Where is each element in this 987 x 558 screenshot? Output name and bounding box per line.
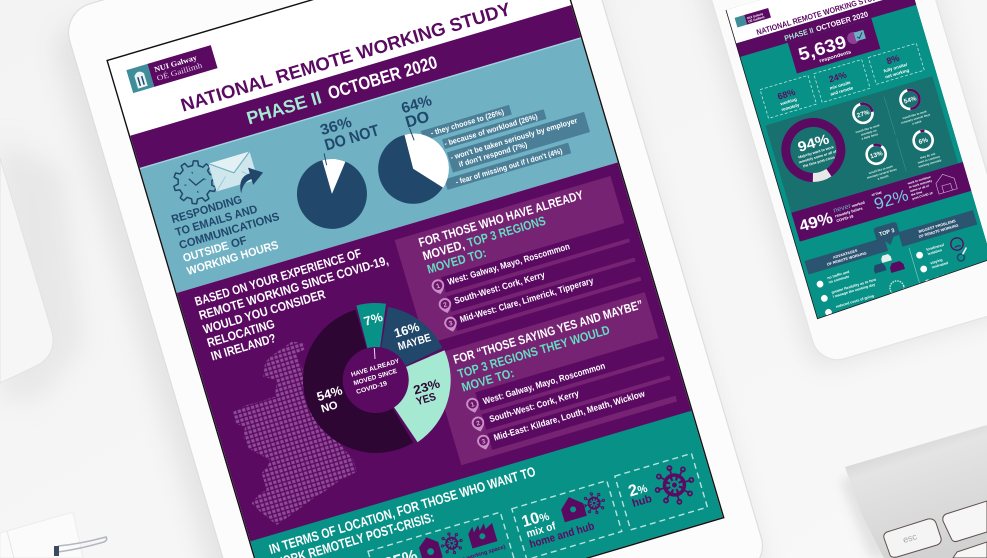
list rows: West: Galway, Mayo, Roscommon: [482, 361, 606, 406]
stat: 2%: [625, 461, 699, 517]
phone: [696, 0, 987, 366]
stat: 25%: [380, 516, 506, 558]
phone stat text: 68%: [776, 87, 796, 102]
phone top 3 lists: greater flexibility as to how: [831, 278, 877, 295]
phone top 3 headers: OF REMOTE WORKING: [826, 251, 867, 267]
phone body: [696, 0, 987, 366]
phone header: OÉ Gaillimh: [747, 14, 765, 24]
phone big donut: remotely some or all of: [798, 149, 838, 165]
pins: 2: [443, 301, 448, 309]
phone top 3 headers: [804, 210, 978, 274]
segment: yes 23%: [394, 350, 451, 442]
list rows: [446, 244, 593, 322]
reasons list: [420, 105, 590, 190]
phone top 3 lists: no traffic and: [827, 270, 850, 280]
donut labels: 23%: [412, 376, 442, 397]
infographic screen: [108, 0, 723, 558]
responding text: RESPONDING: [170, 194, 244, 226]
chart: 64% do pie: [378, 96, 449, 204]
phone dark panel: [765, 76, 958, 213]
pins: 3: [448, 320, 454, 328]
phase band: OCTOBER 2020: [326, 52, 440, 103]
phone small donuts: [851, 87, 935, 166]
key: esc: [884, 519, 941, 557]
icon: envelope: [208, 152, 258, 192]
dashed boxes: [367, 453, 709, 558]
phone stat text: and remote: [830, 85, 854, 97]
heading: [418, 190, 582, 274]
phone purple stat band: 49%: [797, 210, 835, 236]
phone small donut captions: would like to work: [867, 164, 894, 175]
phone top 3 lists: loneliness/: [926, 243, 945, 252]
phone purple stat band: [791, 162, 971, 242]
phone top 3 headers: TOP 3: [879, 228, 895, 238]
phone top 3 headers: OF REMOTE WORKING: [918, 223, 959, 239]
phone big donut: [781, 118, 846, 182]
relocating question: WOULD YOU CONSIDER: [201, 287, 327, 337]
phone shadow: [688, 0, 987, 372]
phone screen edge: [726, 0, 987, 319]
location heading: [267, 464, 541, 558]
logo: NUI Galway: [153, 53, 198, 74]
phone top 3 headers: ADVANTAGES: [833, 249, 858, 260]
heading: MOVED TO:: [425, 246, 488, 277]
heading: TOP 3 REGIONS THEY WOULD: [456, 323, 611, 381]
key: lower row: [953, 542, 987, 558]
phone purple stat band: some or all of: [909, 184, 929, 193]
phone stat text: [778, 55, 910, 112]
stat: 2%: hub: [631, 493, 654, 510]
logo: [126, 45, 218, 93]
phone respondents block: [788, 18, 880, 73]
chart: 36% do not pie: DO NOT: [323, 122, 381, 154]
panel: already moved regions: [395, 174, 650, 344]
phone stat text: 8%: [885, 53, 901, 66]
logo: OÉ Gaillimh: [155, 60, 203, 83]
tablet body: [61, 0, 770, 558]
phone big donut: 94%: [796, 130, 831, 155]
phone top 3 lists: reduced costs of going: [835, 294, 874, 309]
list rows: South-West: Cork, Kerry: [453, 270, 546, 306]
list rows: [482, 364, 644, 441]
pins: 3: [481, 438, 487, 446]
phone top 3 lists: motivated: [931, 261, 949, 270]
phone purple stat band: COVID-19: [836, 214, 854, 223]
phone purple stat band: post-COVID-19: [912, 191, 933, 201]
donut labels: 16%: [392, 320, 421, 341]
icon: arrow: [240, 168, 263, 194]
list rows: Mid-East: Kildare, Louth, Meath, Wicklow: [493, 388, 647, 443]
list rows: Mid-West: Clare, Limerick, Tipperary: [459, 275, 595, 324]
phone small donut arcs: [860, 88, 925, 148]
phone purple stat band: the time: [911, 190, 923, 197]
key: second: [943, 501, 987, 542]
phone screen: [726, 0, 987, 326]
phone stat text: working: [779, 97, 798, 107]
donut labels: MAYBE: [397, 332, 433, 353]
reasons list: if don't respond (7%): [458, 140, 529, 169]
phone header: NUI Galway: [747, 12, 764, 20]
stat: 10%: home and hub: [528, 520, 596, 551]
phone small donut captions: would like to work: [901, 109, 927, 121]
heading: MOVED,: [421, 238, 466, 263]
phone small donut labels: 13%: [869, 150, 884, 160]
phone small donut captions: [855, 110, 942, 180]
object: white device top-left: [0, 140, 84, 400]
relocating question: RELOCATING: [205, 317, 276, 350]
donut labels: NO: [320, 399, 340, 416]
chart: 36% do not pie: [297, 117, 378, 229]
phone top 3 lists: isolation: [927, 248, 942, 256]
phone top 3 lists: no commute: [828, 275, 850, 284]
phase band: PHASE II: [244, 87, 324, 128]
relocating question: REMOTE WORKING SINCE COVID-19,: [197, 253, 390, 323]
phone small donut captions: want to continue: [916, 154, 941, 165]
relocating question: [194, 248, 389, 360]
panel: location: [250, 411, 723, 558]
relocating question: BASED ON YOUR EXPERIENCE OF: [193, 246, 363, 309]
phone stat text: fully onsite/: [883, 62, 909, 74]
title: NATIONAL REMOTE WORKING STUDY: [178, 0, 514, 116]
phone stat text: remotely: [781, 102, 800, 112]
phone purple stat band: 92%: [872, 187, 911, 213]
phone dashed stat boxes: [760, 43, 925, 118]
phone header: OCTOBER 2020: [815, 10, 869, 33]
donut labels: 7%: [362, 310, 384, 329]
key: esc: esc: [902, 531, 918, 545]
phone purple stat band: to work remotely: [908, 179, 933, 189]
reasons list: - won't be taken seriously by employer: [449, 116, 578, 162]
chart: 64% do pie: 64%: [399, 92, 434, 117]
phone big donut: the time post-crisis: [803, 155, 835, 168]
phone top 3 lists: physical: [934, 273, 949, 281]
phone big donut: Majority want to work: [798, 145, 834, 159]
object: keyboard: [840, 425, 987, 558]
panel: yes and maybe regions: [429, 290, 686, 465]
chart: 36% do not pie: 36%: [318, 114, 354, 139]
list rows: West: Galway, Mayo, Roscommon: [446, 241, 571, 287]
phone respondents block: respondents: [819, 49, 852, 64]
reasons list: - because of workload (26%): [443, 112, 539, 148]
responding text: OUTSIDE: [182, 240, 230, 265]
phone small donut labels: 6%: [918, 137, 929, 146]
tablet shadow: [49, 0, 770, 558]
phone small donut captions: remotely several times: [866, 167, 898, 180]
phone purple stat band: worked: [850, 200, 866, 209]
phone top 3 lists: [816, 243, 948, 316]
icon: cars: [874, 254, 905, 274]
phone header: [726, 0, 916, 57]
heading: MOVE TO:: [460, 366, 516, 395]
stat: 10%: [519, 488, 612, 551]
stat: 10%: mix of: [525, 520, 558, 540]
phone top 3 lists: staying: [930, 258, 943, 265]
pins: 2: [476, 420, 481, 428]
stat: 2%: 2%: [627, 479, 649, 500]
phone small donut captions: a month: [877, 174, 889, 181]
phone small donut labels: 27%: [856, 109, 871, 119]
screen edge: [107, 0, 724, 558]
panel: responding to emails: [140, 37, 618, 293]
phone stat text: mix onsite: [829, 80, 852, 91]
phone small donut captions: would like to work: [854, 123, 880, 134]
donut labels: MOVED SINCE: [353, 368, 399, 387]
list rows: South-West: Cork, Kerry: [488, 388, 580, 424]
phase band: [130, 5, 581, 168]
heading: [453, 300, 642, 392]
phone stat text: 24%: [828, 70, 848, 84]
responding text: TO EMAILS AND: [174, 203, 259, 239]
panel: relocating: [177, 162, 692, 542]
phone purple stat band: of that: [871, 190, 883, 197]
phone icons: [874, 237, 967, 293]
phone small donut labels: 54%: [903, 95, 918, 106]
donut labels: YES: [415, 391, 438, 408]
pins: [466, 398, 490, 450]
phone top 3 lists: I manage the working day: [832, 283, 876, 299]
phone small donut captions: remotely several days: [901, 112, 931, 125]
responding text: WORKING HOURS: [186, 239, 280, 278]
responding text: OF: [230, 235, 248, 251]
segment: maybe 16%: [381, 307, 442, 366]
phone small donut captions: a daily basis: [861, 132, 879, 141]
pins: 1: [436, 283, 441, 290]
phone small donut captions: a week: [912, 119, 922, 126]
tablet: [61, 0, 770, 558]
heading: TOP 3 REGIONS: [466, 214, 547, 250]
responding text: COMMUNICATIONS: [178, 211, 281, 252]
donut labels: [298, 298, 449, 435]
responding text: [171, 196, 280, 275]
phone small donut labels: [856, 95, 930, 161]
object: notebook with ring: [0, 512, 107, 558]
pins: [432, 279, 457, 332]
phone purple stat band: never: [833, 203, 853, 215]
chart: 64% do pie: DO: [404, 108, 431, 132]
relocating question: IN IRELAND?: [209, 331, 278, 364]
donut labels: COVID-19: [355, 380, 389, 396]
map: Ireland dots: [233, 342, 357, 525]
phone purple stat band: remotely before: [835, 206, 863, 218]
stat: 10%: 10%: [520, 507, 551, 531]
heading: FOR THOSE WHO HAVE ALREADY: [417, 188, 586, 250]
phone respondents block: 5,639: [796, 32, 849, 65]
reasons list: - they choose to (26%): [430, 107, 505, 138]
phone small donut captions: remotely on: [860, 128, 877, 137]
location heading: IN TERMS OF LOCATION, FOR THOSE WHO WANT TO: [267, 464, 537, 557]
phone small donut captions: working remotely: [917, 158, 942, 169]
reasons list: - fear of missing out if I don't (4%): [454, 146, 564, 187]
donut labels: HAVE ALREADY: [350, 358, 401, 379]
phone stat text: not working: [884, 68, 910, 79]
phone header: PHASE II: [783, 26, 815, 43]
phone top 3 headers: BIGGEST PROBLEMS: [918, 219, 957, 234]
segment: already moved 7%: [356, 303, 386, 348]
segment: no 54%: [303, 310, 413, 453]
pins: 1: [470, 401, 476, 409]
heading: FOR “THOSE SAYING YES AND MAYBE”: [452, 297, 645, 367]
icon: gear and clock: [173, 160, 216, 204]
donut labels: 54%: [315, 383, 344, 404]
phone purple stat band: want to continue: [906, 175, 932, 186]
phone small donut captions: they do not: [920, 152, 936, 160]
chart: relocation donut: [298, 298, 451, 453]
